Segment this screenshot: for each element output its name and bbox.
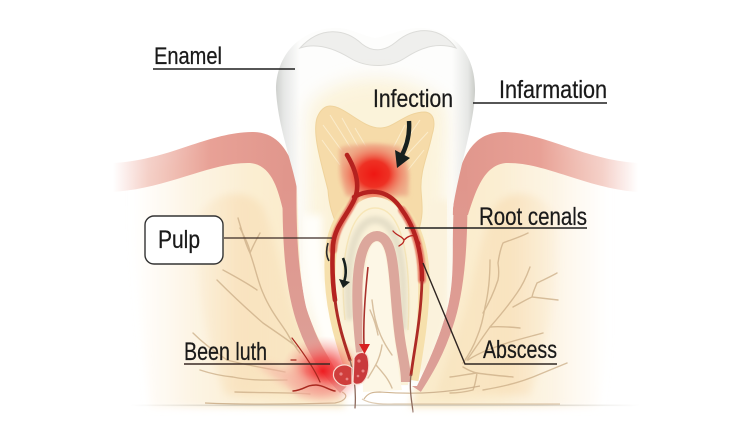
pale arches inside core <box>343 208 409 330</box>
label: Abscess: Abscess <box>483 336 557 364</box>
pulp striations <box>322 115 428 170</box>
infection red glow <box>336 141 412 207</box>
label: Abscess <box>423 263 557 364</box>
black arrow: infection into pulp <box>395 121 410 168</box>
red abscess glow <box>255 336 365 406</box>
panel: left gum and bone <box>113 132 345 408</box>
label: Pulp box <box>145 216 332 264</box>
right root membrane <box>415 165 460 388</box>
red vessels near abscess <box>291 338 335 391</box>
canal: right red nerve <box>354 192 422 412</box>
central bone arch <box>362 242 402 392</box>
central pink arch <box>357 236 406 382</box>
abscess sac <box>333 352 369 386</box>
small dark mark <box>327 243 329 261</box>
label: Infarmation: Infarmation <box>499 76 607 104</box>
canal: left red nerve <box>332 155 357 408</box>
infected pulp tissue <box>339 144 409 196</box>
label: Infection: Infection <box>373 85 453 113</box>
panel: right gum and bone <box>410 132 638 408</box>
bone base and root tips <box>130 386 640 406</box>
label: Enamel: Enamel <box>154 43 222 70</box>
veins right <box>368 233 567 393</box>
branched lesion on right canal <box>393 231 420 246</box>
label: Been luth: Been luth <box>184 338 267 366</box>
pulp chamber <box>316 106 434 232</box>
yellow canal halo left <box>332 208 352 368</box>
inner tooth shading <box>305 79 450 372</box>
label: Pulp box: Pulp <box>158 226 200 254</box>
tooth infection infographic <box>118 30 633 413</box>
veins left <box>193 218 310 394</box>
label: Root cenals: Root cenals <box>479 203 587 231</box>
left root membrane <box>290 165 345 388</box>
root canal layers <box>332 197 422 385</box>
bottom fade <box>100 408 660 424</box>
crown occlusal surface <box>300 31 456 66</box>
tooth body <box>276 28 475 386</box>
black arrow: down root <box>339 258 350 288</box>
red arrow: spread to abscess <box>359 267 370 354</box>
core between canals <box>335 197 418 385</box>
yellow canal halo right <box>398 208 422 380</box>
